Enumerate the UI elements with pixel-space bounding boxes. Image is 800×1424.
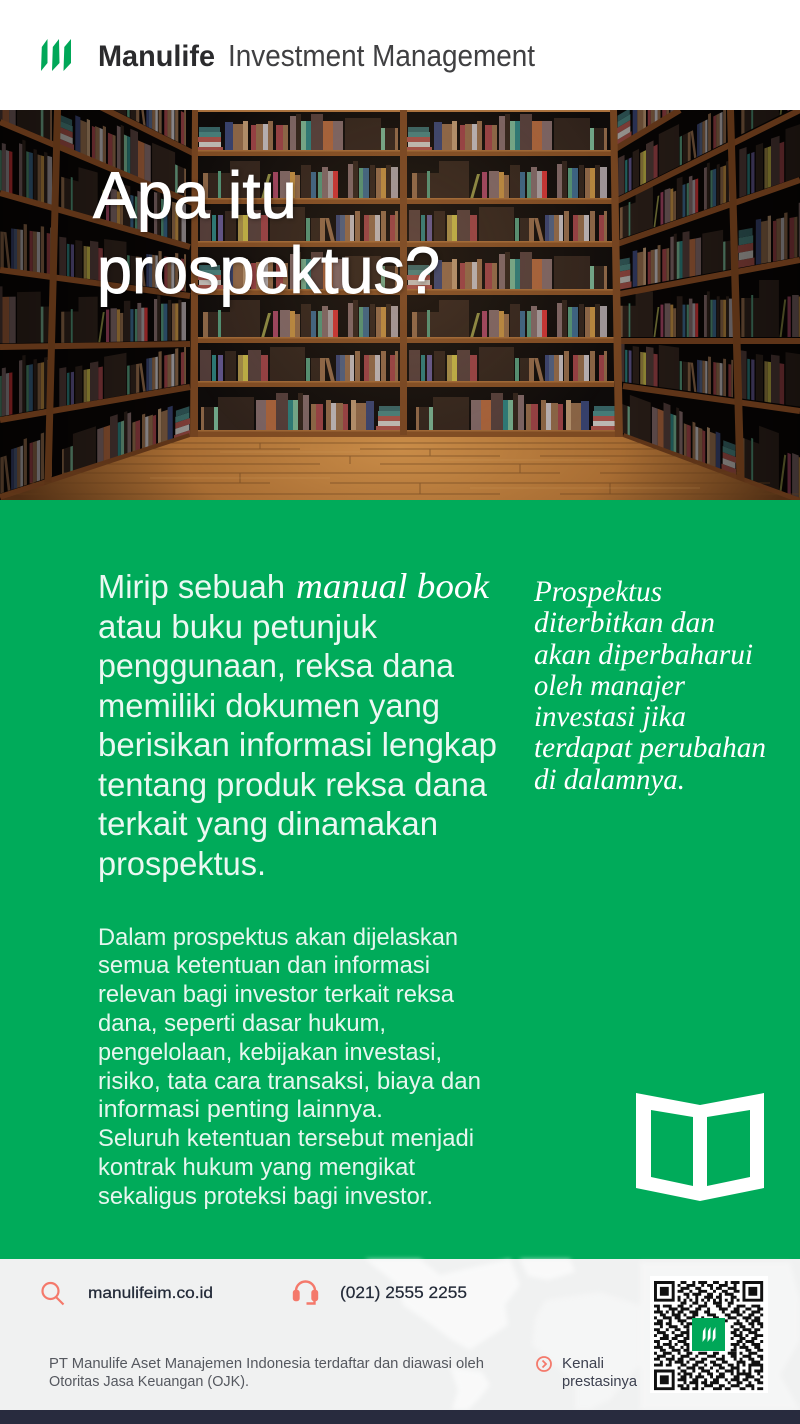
- text block: prospectus details: pengelolaan, kebijakan investasi,: [98, 1039, 442, 1066]
- text block: prospectus details: kontrak hukum yang mengikat: [98, 1154, 415, 1181]
- call to action label: [562, 1356, 638, 1390]
- QR code: [650, 1276, 768, 1393]
- brand name: Manulife: [98, 40, 215, 73]
- hero title: [93, 158, 440, 307]
- hero photo: library bookshelves: [0, 110, 800, 500]
- text block: introduction: penggunaan, reksa dana: [98, 647, 455, 684]
- text block: prospectus details: dana, seperti dasar hukum,: [98, 1010, 386, 1037]
- text block: italic side note: akan diperbaharui: [534, 638, 753, 671]
- regulatory note: Otoritas Jasa Keuangan (OJK).: [49, 1374, 249, 1390]
- text block: prospectus details: sekaligus proteksi bagi investor.: [98, 1183, 433, 1210]
- text block: introduction: manual book: [296, 566, 490, 606]
- text block: introduction: Mirip sebuah: [98, 568, 285, 605]
- QR centre logo: [692, 1318, 725, 1351]
- text block: prospectus details: Dalam prospektus akan dijelaskan: [98, 924, 458, 951]
- website: manulifeim.co.id: [88, 1285, 213, 1302]
- text block: italic side note: Prospektus: [533, 575, 662, 608]
- text block: prospectus details: [98, 924, 481, 1210]
- text block: italic side note: investasi jika: [534, 700, 686, 733]
- text block: italic side note: diterbitkan dan: [534, 606, 715, 639]
- regulatory note: [49, 1356, 484, 1390]
- text block: italic side note: di dalamnya.: [534, 763, 685, 796]
- icon: search: [42, 1283, 64, 1304]
- icon: headset: [294, 1282, 317, 1304]
- navy footer bar: [0, 1410, 800, 1424]
- text block: introduction: atau buku petunjuk: [98, 608, 377, 645]
- text block: introduction: tentang produk reksa dana: [98, 766, 488, 803]
- text block: prospectus details: relevan bagi investor terkait reksa: [98, 981, 455, 1008]
- icon: open book: [636, 1093, 764, 1201]
- call to action label: prestasinya: [562, 1374, 638, 1390]
- hero title: Apa itu: [93, 158, 297, 232]
- world map backdrop: [365, 1259, 800, 1410]
- call to action label: Kenali: [562, 1356, 604, 1372]
- text block: prospectus details: semua ketentuan dan informasi: [98, 952, 430, 979]
- text block: introduction: berisikan informasi lengkap: [98, 726, 497, 763]
- text block: introduction: terkait yang dinamakan: [98, 805, 438, 842]
- hero title: prospektus?: [97, 233, 440, 307]
- text block: introduction: prospektus.: [98, 845, 266, 882]
- panel: footer: [0, 1259, 800, 1424]
- panel: green content: [0, 500, 800, 1259]
- text block: prospectus details: informasi penting lainnya.: [98, 1096, 383, 1123]
- brand descriptor: Investment Management: [228, 38, 535, 73]
- phone number: (021) 2555 2255: [340, 1284, 467, 1302]
- text block: prospectus details: Seluruh ketentuan tersebut menjadi: [98, 1125, 474, 1152]
- text block: italic side note: [533, 575, 766, 796]
- header logo: [41, 38, 535, 73]
- text block: italic side note: terdapat perubahan: [534, 731, 766, 764]
- text block: introduction: memiliki dokumen yang: [98, 687, 440, 724]
- icon: chevron circle: [537, 1357, 551, 1371]
- regulatory note: PT Manulife Aset Manajemen Indonesia terdaftar dan diawasi oleh: [49, 1356, 484, 1372]
- text block: introduction: [98, 566, 497, 882]
- text block: prospectus details: risiko, tata cara transaksi, biaya dan: [98, 1068, 481, 1095]
- icon: Manulife three bars: [41, 39, 71, 71]
- text block: italic side note: oleh manajer: [534, 669, 685, 702]
